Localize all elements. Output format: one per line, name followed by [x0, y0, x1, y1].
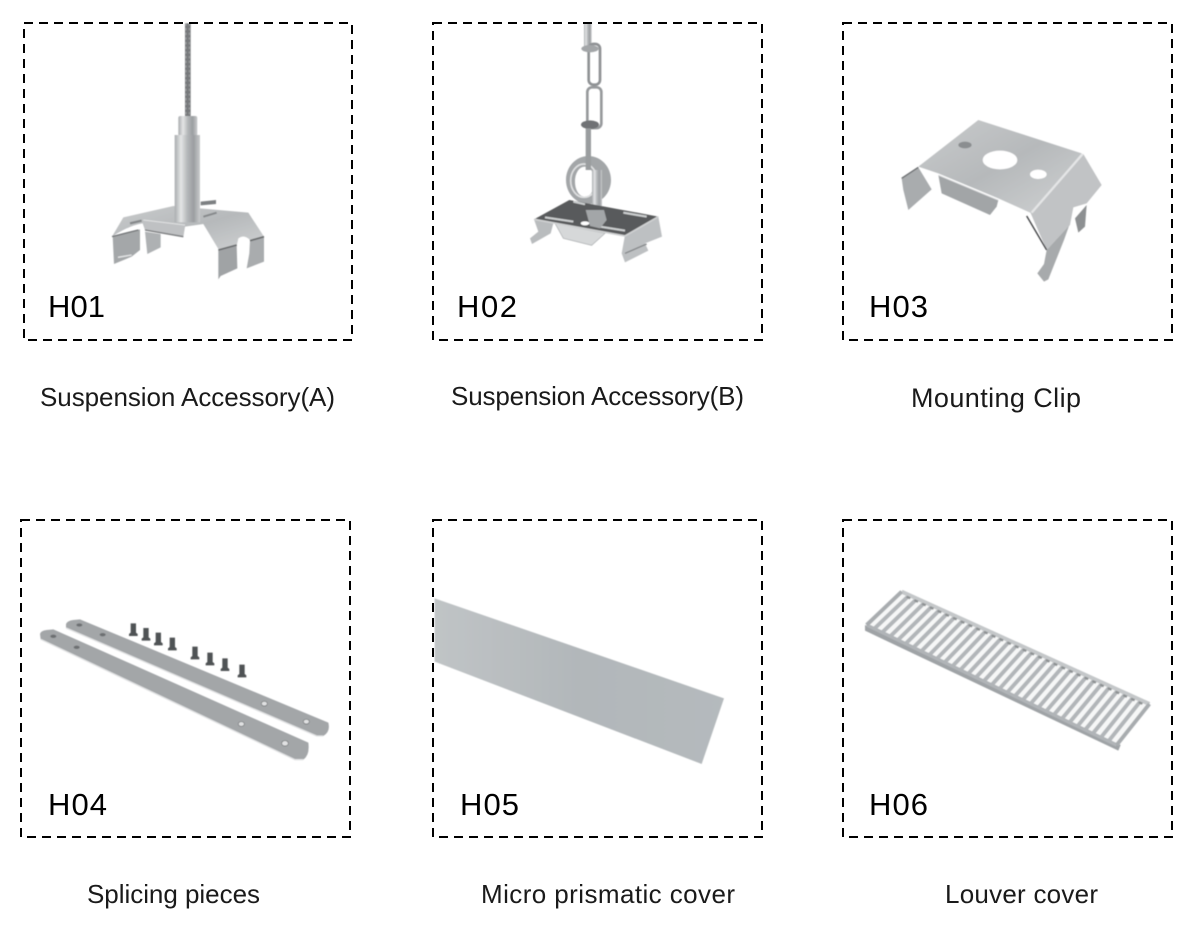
- code H02: H02: [457, 289, 517, 324]
- panel: H04 splicing pieces: [21, 520, 350, 909]
- icon: louver grid: [865, 592, 1149, 751]
- caption H06: Louver cover: [945, 879, 1098, 909]
- panel: H01 suspension accessory A: [24, 23, 352, 412]
- icon: chain suspension with eye ring and clip: [530, 23, 662, 262]
- dashed frame H05: [433, 520, 762, 837]
- icon: wire suspension with clip: [112, 23, 264, 279]
- dashed frame H04: [21, 520, 350, 837]
- code H06: H06: [869, 787, 928, 822]
- code H05: H05: [460, 787, 519, 822]
- dashed frame H02: [433, 23, 762, 340]
- dashed frame H01: [24, 23, 352, 340]
- icon: mounting clip: [902, 120, 1102, 282]
- caption H01: Suspension Accessory(A): [40, 382, 335, 412]
- dashed frame H03: [843, 23, 1172, 340]
- caption H04: Splicing pieces: [87, 879, 260, 909]
- panel: H06 louver cover: [843, 520, 1172, 909]
- panel: H02 suspension accessory B: [433, 23, 762, 411]
- code H01: H01: [48, 289, 105, 324]
- code H04: H04: [48, 787, 107, 822]
- dashed frame H06: [843, 520, 1172, 837]
- icon: two bars with screws: [40, 619, 329, 760]
- panel: H03 mounting clip: [843, 23, 1172, 413]
- icon: prismatic cover strip: [435, 598, 724, 764]
- caption H05: Micro prismatic cover: [481, 879, 735, 909]
- caption H02: Suspension Accessory(B): [451, 381, 744, 411]
- caption H03: Mounting Clip: [911, 383, 1081, 413]
- code H03: H03: [869, 289, 928, 324]
- panel: H05 micro prismatic cover: [433, 520, 762, 909]
